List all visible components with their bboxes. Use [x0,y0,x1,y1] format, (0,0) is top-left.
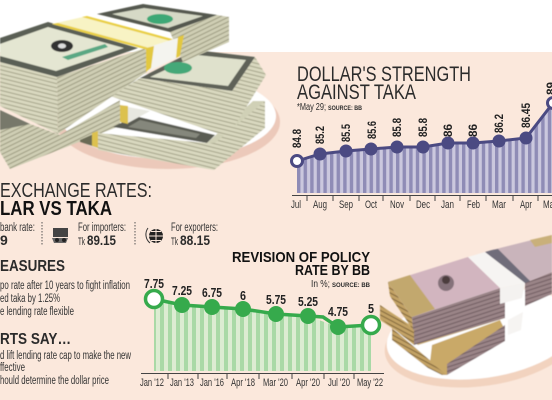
chart title: policy rate: RATE BY BB [295,262,370,279]
chart: policy rate line: 7.75 [144,276,164,291]
rates row: For exporters: [171,222,218,234]
heading: exchange rates: EXCHANGE RATES: [0,180,152,202]
chart: dollar against taka line: Oct [365,199,377,211]
chart: dollar against taka line: 86.2 [492,114,506,133]
chart: policy rate line: 6.75 [202,285,222,300]
chart: dollar against taka line: 84.8 [290,129,304,148]
chart title: policy rate: SOURCE: BB [332,283,371,289]
chart: dollar against taka line: Aug [313,199,327,211]
chart title: policy rate: REVISION OF POLICY [232,249,370,266]
chart title: policy rate [232,249,371,290]
chart title: dollar's strength: *May 29; [297,102,326,113]
rates row: 88.15 [180,232,210,248]
image: stacks of dollar notes [0,4,280,170]
chart: policy rate line [140,276,384,389]
chart: policy rate line: Apr '20 [296,377,320,389]
chart: dollar against taka line: 85.8 [390,118,404,137]
chart: dollar against taka line: Apr [520,199,532,211]
heading: exchange rates: LAR VS TAKA [0,198,112,220]
chart: policy rate line: Mar '20 [263,377,288,389]
chart title: dollar's strength: DOLLAR'S STRENGTH [297,63,471,86]
rates row: 9 [0,232,8,248]
chart: policy rate line: Jan '16 [200,377,224,389]
heading: exchange rates [0,180,152,220]
chart: dollar against taka line: Feb [467,199,480,211]
chart: policy rate line: 5.75 [266,292,286,307]
chart: policy rate line: May '22 [357,377,383,389]
panel: measures [0,258,130,318]
chart: dollar against taka line: 85.6 [365,121,379,139]
chart: dollar against taka line: 86 [441,124,455,137]
image: stacks of taka notes [379,235,552,399]
chart: dollar against taka line: Sep [339,199,353,211]
panel: measures: EASURES [0,258,65,275]
chart: dollar against taka line: 86 [466,124,480,137]
panel: experts say: RTS SAY… [0,331,71,348]
chart: policy rate line: 5 [368,301,374,316]
panel: experts say: ffective [0,362,25,374]
panel: experts say: hould determine the dollar price [0,375,109,387]
rates row [0,222,218,248]
chart: policy rate line: 7.25 [172,283,192,298]
chart: dollar against taka line: Mar [492,199,506,211]
chart: dollar against taka line [290,82,552,211]
chart: policy rate line: 6 [240,288,246,303]
chart: dollar against taka line: 85.2 [313,126,327,144]
chart: dollar against taka line: 85.5 [339,124,353,142]
chart: policy rate line: Jul '20 [328,377,350,389]
icon: importer truck [52,228,68,243]
chart title: dollar's strength: SOURCE: BB [328,106,363,112]
chart: dollar against taka line: 85.8 [416,118,430,137]
rates row: 89.15 [87,232,116,248]
chart: policy rate line: 4.75 [328,304,348,319]
chart: policy rate line: Jan '13 [170,377,194,389]
chart: dollar against taka line: Dec [416,199,430,211]
chart: dollar against taka line: Jan [441,199,454,211]
panel: experts say: d lift lending rate cap to make the new [0,350,131,362]
icon: exporter globe [146,228,163,243]
panel: measures: ed taka by 1.25% [0,293,60,305]
panel: experts say [0,331,131,387]
panel: measures: po rate after 10 years to fight inflation [0,280,130,292]
chart: policy rate line: Jan '12 [140,377,164,389]
rates row: For importers: [78,222,126,234]
chart: dollar against taka line: Nov [390,199,404,211]
chart: policy rate line: 5.25 [298,294,318,309]
chart title: policy rate: In %; [311,279,330,290]
rates row: Tk [171,236,178,248]
chart title: dollar's strength: AGAINST TAKA [297,81,416,104]
rates row: bank rate: [0,222,35,234]
chart: policy rate line: Apr '18 [231,377,255,389]
rates row: Tk [78,236,85,248]
chart: dollar against taka line: 86.45 [519,103,533,128]
panel: measures: e lending rate flexible [0,306,74,318]
chart: dollar against taka line: Jul [291,199,301,211]
chart title: dollar's strength [297,63,471,113]
